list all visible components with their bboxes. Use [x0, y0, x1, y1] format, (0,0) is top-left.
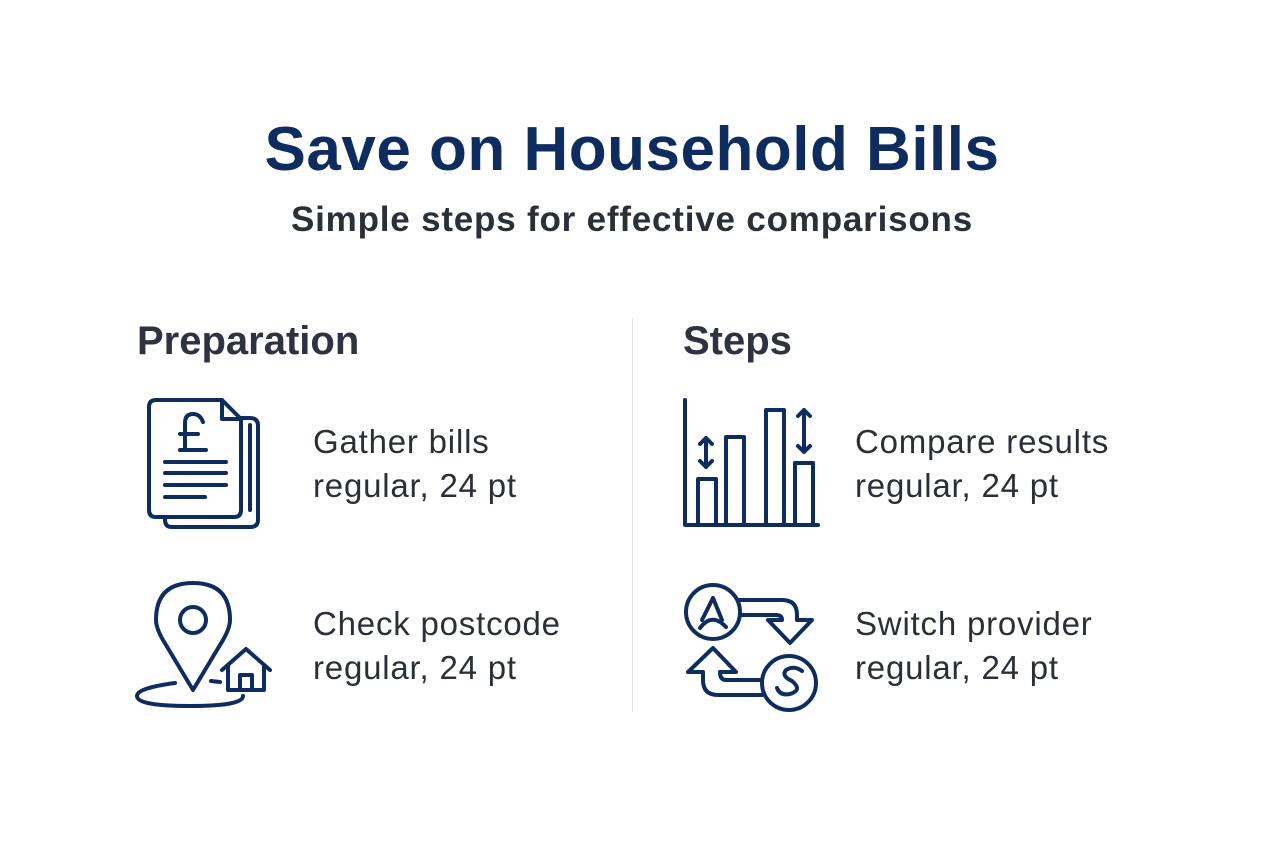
- text: gather bills: regular, 24 pt: [313, 467, 517, 504]
- divider: [632, 318, 633, 712]
- text: switch provider: [855, 605, 1093, 686]
- text: check postcode: Check postcode: [313, 605, 561, 642]
- text: compare results: regular, 24 pt: [855, 467, 1059, 504]
- text: gather bills: [313, 423, 517, 504]
- heading: steps: Steps: [683, 319, 792, 363]
- title: Save on Household Bills: [264, 115, 999, 184]
- text: switch provider: Switch provider: [855, 605, 1093, 642]
- text: check postcode: regular, 24 pt: [313, 649, 517, 686]
- heading: preparation: Preparation: [137, 319, 359, 363]
- text: gather bills: Gather bills: [313, 423, 490, 460]
- text: compare results: Compare results: [855, 423, 1109, 460]
- text: switch provider: regular, 24 pt: [855, 649, 1059, 686]
- subtitle: Simple steps for effective comparisons: [291, 200, 973, 239]
- text: check postcode: [313, 605, 561, 686]
- text: compare results: [855, 423, 1109, 504]
